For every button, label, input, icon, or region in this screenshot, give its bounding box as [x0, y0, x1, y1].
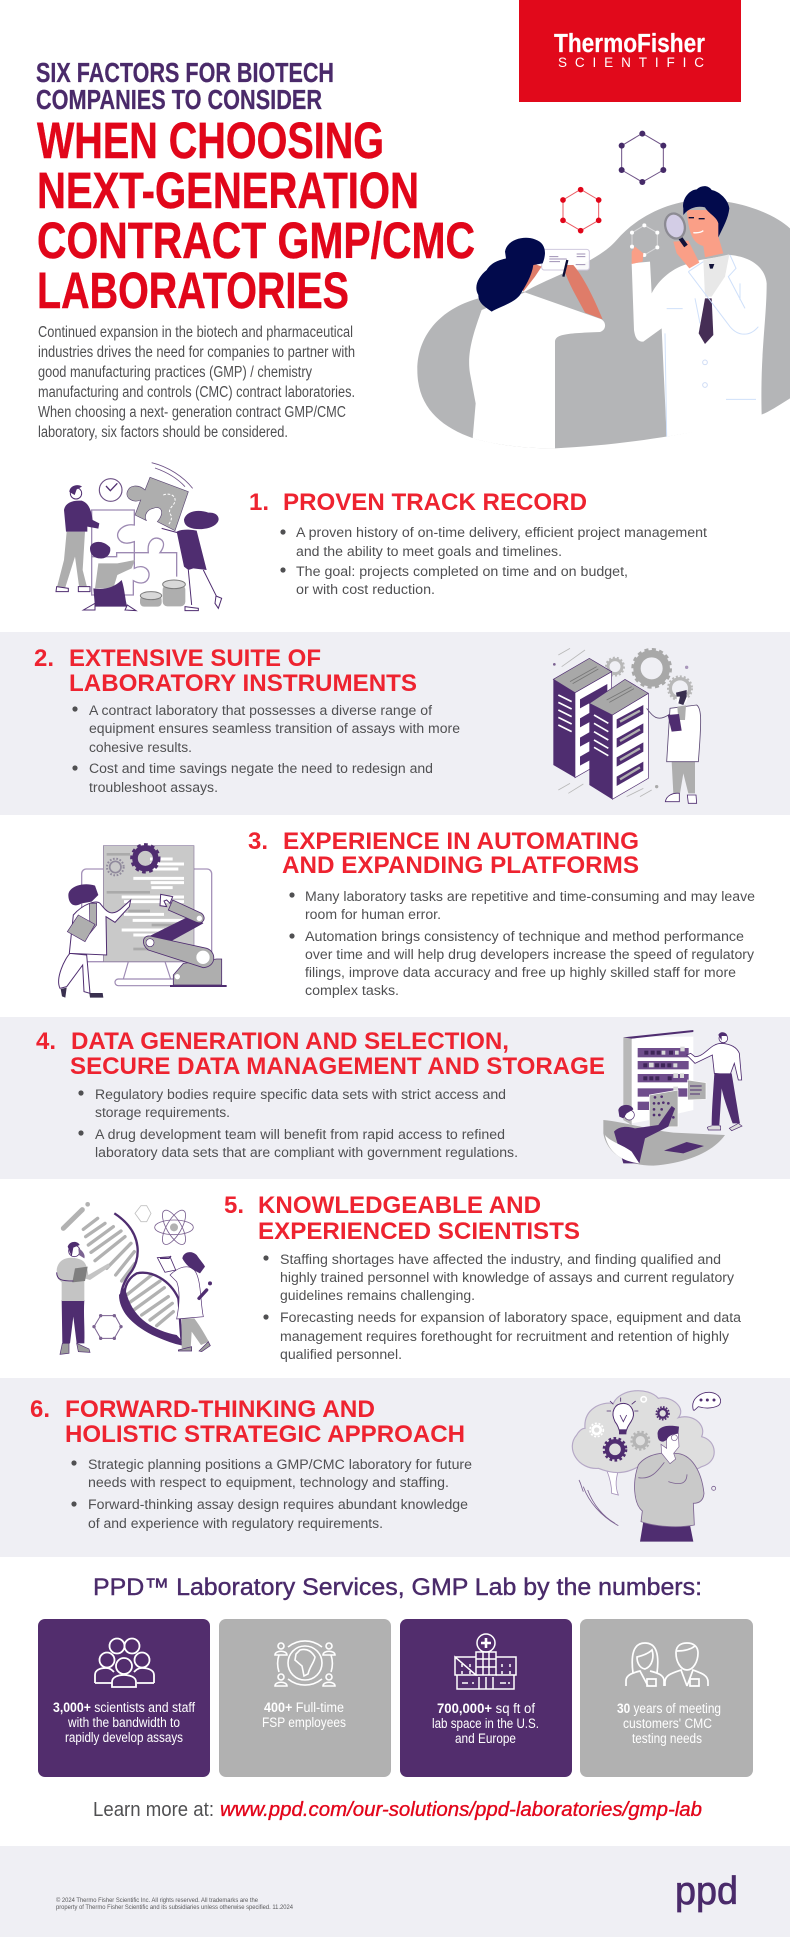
card: years of experience — [580, 1619, 753, 1777]
title block — [36, 57, 475, 319]
gears — [590, 1397, 669, 1460]
heading: laboratory instruments: LABORATORY INSTRUMENTS — [69, 670, 417, 697]
lightbulb — [607, 1398, 638, 1434]
copyright — [56, 1897, 294, 1911]
scientist — [647, 690, 701, 803]
logo: Thermo Fisher Scientific: ThermoFisher — [554, 30, 705, 58]
heading: data generation: DATA GENERATION AND SELECTION, — [71, 1028, 509, 1055]
panel: factor 6 — [0, 1378, 790, 1557]
panel: hero illustration of two scientists — [417, 131, 790, 448]
bullets: and the ability to meet goals and timelines. — [296, 544, 562, 560]
heading: proven track record: PROVEN TRACK RECORD — [283, 489, 587, 516]
heading: knowledgeable scientists — [224, 1192, 580, 1245]
logo: Thermo Fisher Scientific — [519, 0, 741, 102]
heading: forward-thinking: HOLISTIC STRATEGIC APPROACH — [65, 1421, 465, 1448]
speech bubble — [693, 1392, 721, 1410]
bullets: Many laboratory tasks are repetitive and time-consuming and may leave — [305, 889, 755, 905]
heading: laboratory instruments: 2. — [34, 645, 54, 672]
bullets: Cost and time savings negate the need to redesign and — [89, 761, 433, 777]
icon: group of people — [95, 1638, 154, 1687]
subtitle — [36, 57, 334, 115]
bullets: A proven history of on-time delivery, efficient project management — [296, 525, 707, 541]
bullets: highly trained personnel with knowledge of assays and current regulatory — [280, 1270, 735, 1286]
bullets: Strategic planning positions a GMP/CMC laboratory for future — [88, 1457, 472, 1473]
icon: purple molecule — [619, 131, 666, 185]
heading: laboratory instruments: EXTENSIVE SUITE OF — [69, 645, 321, 672]
icon: hospital building — [455, 1634, 516, 1689]
card text: customers' CMC — [623, 1716, 712, 1731]
card text: with the bandwidth to — [67, 1715, 180, 1730]
woman in lab coat — [59, 884, 131, 998]
rack one — [553, 658, 612, 778]
bullets: A contract laboratory that possesses a diverse range of — [89, 703, 432, 719]
intro paragraph: manufacturing and controls (CMC) contract laboratories. — [38, 384, 355, 401]
heading: knowledgeable scientists: 5. — [224, 1192, 244, 1219]
card text: 3,000+ scientists and staff — [53, 1700, 195, 1715]
heading: automating and expanding platforms: AND EXPANDING PLATFORMS — [282, 852, 639, 879]
intro paragraph: good manufacturing practices (GMP) / chemistry — [38, 364, 312, 381]
icon: globe with people — [275, 1641, 335, 1686]
bullets: filings, improve data accuracy and free up highly skilled staff for more — [305, 965, 736, 981]
main title — [37, 112, 475, 319]
bullets: of and experience with regulatory requirements. — [88, 1516, 383, 1532]
copyright: © 2024 Thermo Fisher Scientific Inc. All rights reserved. All trademarks are the — [56, 1897, 259, 1904]
heading: by the numbers: PPD™ Laboratory Services, GMP Lab by the numbers: — [93, 1574, 702, 1601]
heading: automating and expanding platforms: EXPERIENCE IN AUTOMATING — [283, 828, 639, 855]
bullets — [289, 889, 755, 999]
panel: factor 2 — [0, 632, 790, 815]
seated woman — [605, 1105, 704, 1163]
icon: DNA helix and scientists — [57, 1202, 212, 1354]
scientist with magnifying glass — [632, 186, 767, 437]
card: full-time employees — [219, 1619, 391, 1777]
bullets: Automation brings consistency of technique and method performance — [305, 929, 744, 945]
reaching woman — [162, 511, 222, 611]
bullets — [72, 703, 460, 796]
rack two — [589, 679, 648, 799]
card text — [262, 1700, 346, 1730]
heading: proven track record: 1. — [249, 489, 269, 516]
card text: 400+ Full-time — [264, 1700, 344, 1715]
heading: automating and expanding platforms: 3. — [248, 828, 268, 855]
bullets: Forecasting needs for expansion of laboratory space, equipment and data — [280, 1310, 741, 1326]
card text: testing needs — [632, 1731, 702, 1746]
bullets: cohesive results. — [89, 740, 192, 756]
card text — [617, 1701, 721, 1746]
bullets — [280, 525, 707, 598]
bullets — [71, 1457, 472, 1532]
card: scientists and staff — [38, 1619, 210, 1777]
main title: WHEN CHOOSING — [37, 112, 384, 169]
clock — [99, 479, 122, 501]
card text: 30 years of meeting — [617, 1701, 721, 1716]
heading: data generation — [36, 1028, 605, 1080]
standing man — [687, 1032, 742, 1131]
card text — [432, 1701, 539, 1746]
main title: CONTRACT GMP/CMC — [37, 212, 475, 269]
card text — [53, 1700, 195, 1745]
bullets: laboratory data sets that are compliant with government regulations. — [95, 1145, 518, 1161]
intro paragraph: industries drives the need for companies to partner with — [38, 344, 355, 361]
subtitle: SIX FACTORS FOR BIOTECH — [36, 57, 334, 88]
icon: red molecule — [560, 187, 601, 233]
heading: forward-thinking: 6. — [30, 1396, 50, 1423]
subtitle: COMPANIES TO CONSIDER — [36, 84, 322, 115]
main title: NEXT-GENERATION — [37, 162, 419, 219]
main title: LABORATORIES — [37, 262, 349, 319]
kneeling woman — [83, 542, 136, 611]
learn more link: Learn more at: — [93, 1799, 214, 1821]
bullets: or with cost reduction. — [296, 582, 435, 598]
icon: robot arm and monitor — [59, 845, 227, 998]
intro paragraph: laboratory, six factors should be considered. — [38, 424, 288, 441]
card text: lab space in the U.S. — [432, 1716, 539, 1731]
icon: thinking man — [572, 1391, 721, 1542]
coins — [140, 580, 185, 607]
card text: rapidly develop assays — [65, 1730, 183, 1745]
molecule — [92, 1206, 151, 1340]
gears — [606, 650, 692, 700]
robot arm — [143, 894, 227, 987]
bullets — [263, 1252, 741, 1363]
bullets: A drug development team will benefit from rapid access to refined — [95, 1127, 505, 1143]
bullets: management requires forethought for recruitment and retention of highly — [280, 1329, 730, 1345]
bullets: troubleshoot assays. — [89, 780, 218, 796]
icon: people assembling puzzle — [56, 463, 222, 611]
panel: factor 4 — [0, 1017, 790, 1179]
intro paragraph: When choosing a next- generation contract GMP/CMC — [38, 404, 346, 421]
heading: knowledgeable scientists: EXPERIENCED SCIENTISTS — [258, 1218, 580, 1245]
gears — [107, 845, 159, 875]
female scientist — [157, 1252, 212, 1352]
bullets: Regulatory bodies require specific data sets with strict access and — [95, 1087, 506, 1103]
icon: two scientists — [626, 1643, 708, 1686]
icon: data storage wall and users — [603, 1030, 742, 1166]
standing man — [56, 485, 99, 592]
footer band — [0, 1846, 790, 1937]
icon: server racks and scientist — [553, 648, 701, 803]
bullets: needs with respect to equipment, technology and staffing. — [88, 1475, 449, 1491]
card text: 700,000+ sq ft of — [437, 1701, 535, 1716]
bullets: over time and will help drug developers increase the speed of regulatory — [305, 947, 755, 963]
bullets: storage requirements. — [95, 1105, 230, 1121]
intro paragraph: Continued expansion in the biotech and pharmaceutical — [38, 324, 353, 341]
male scientist — [57, 1242, 110, 1354]
heading: data generation: 4. — [36, 1028, 56, 1055]
card text: and Europe — [455, 1731, 516, 1746]
intro paragraph — [38, 324, 355, 441]
heading: laboratory instruments — [34, 645, 417, 697]
learn more link: www.ppd.com/our-solutions/ppd-laboratories/gmp-lab — [220, 1799, 702, 1821]
heading: forward-thinking — [30, 1396, 465, 1448]
panel: factor 1 — [56, 463, 707, 611]
card: lab space — [400, 1619, 572, 1777]
logo: Thermo Fisher Scientific: SCIENTIFIC — [558, 55, 704, 70]
bullets: equipment ensures seamless transition of assays with more — [89, 721, 460, 737]
bullets: guidelines remains challenging. — [280, 1288, 475, 1304]
heading: data generation: SECURE DATA MANAGEMENT AND STORAGE — [70, 1053, 605, 1080]
panel: factor 3 — [59, 828, 755, 999]
atom — [155, 1207, 193, 1248]
panel: factor 5 — [57, 1192, 741, 1363]
card text: FSP employees — [262, 1715, 346, 1730]
scientist holding a card — [469, 238, 605, 448]
bullets: Staffing shortages have affected the industry, and finding qualified and — [280, 1252, 721, 1268]
heading: automating and expanding platforms — [248, 828, 639, 879]
bullets: qualified personnel. — [280, 1347, 402, 1363]
heading: knowledgeable scientists: KNOWLEDGEABLE AND — [258, 1192, 541, 1219]
bullets: complex tasks. — [305, 983, 399, 999]
copyright: property of Thermo Fisher Scientific and its subsidiaries unless otherwise specified. 11.2024 — [56, 1904, 294, 1911]
icon: white molecule — [630, 223, 659, 257]
logo: ppd: ppd — [675, 1870, 738, 1913]
bullets: Forward-thinking assay design requires abundant knowledge — [88, 1497, 468, 1513]
man — [635, 1426, 704, 1542]
bullets — [78, 1087, 518, 1161]
panels — [688, 1080, 706, 1100]
heading: forward-thinking: FORWARD-THINKING AND — [65, 1396, 375, 1423]
bullets: room for human error. — [305, 907, 441, 923]
bullets: The goal: projects completed on time and on budget, — [296, 564, 628, 580]
